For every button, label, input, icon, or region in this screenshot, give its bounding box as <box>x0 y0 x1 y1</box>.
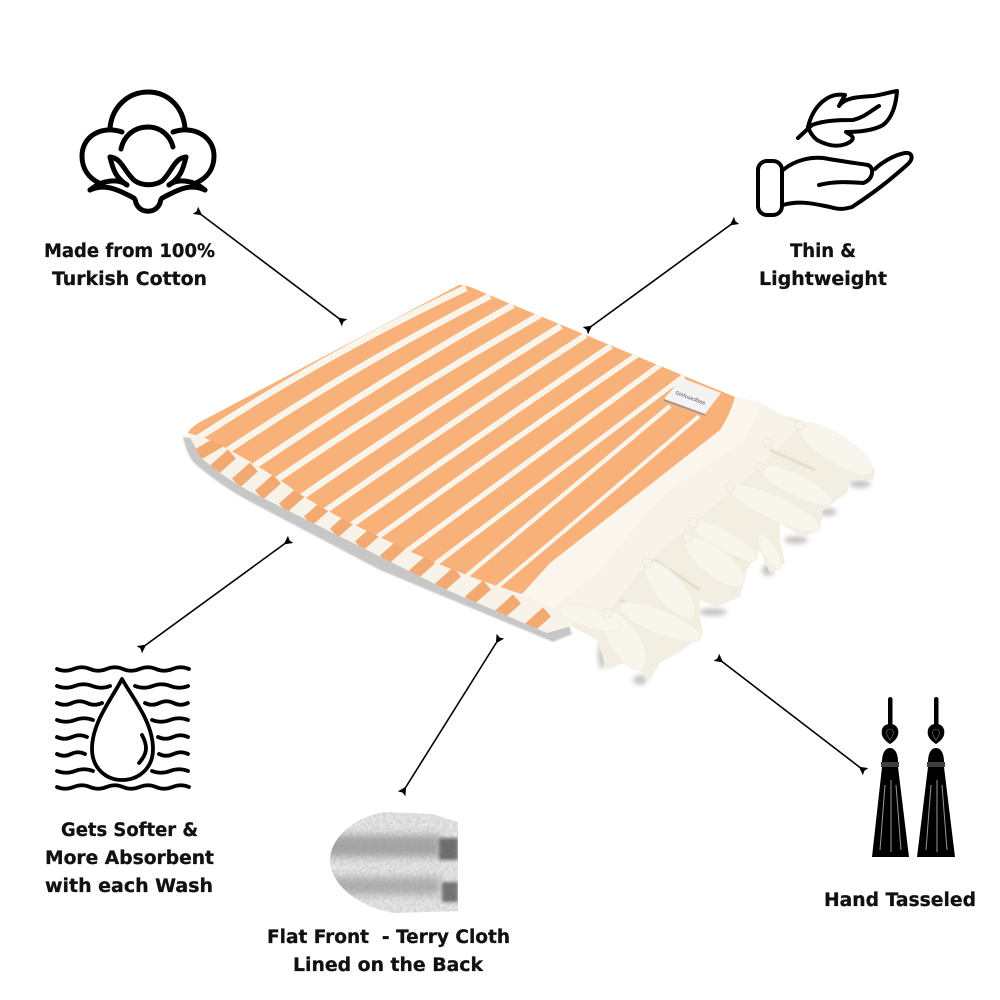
top face orange <box>188 285 735 594</box>
arrow: tassels to towel <box>720 660 862 769</box>
icon: cotton boll <box>82 92 214 211</box>
arrow: lightweight to towel <box>589 223 733 328</box>
heading: hand tasseled: Hand Tasseled <box>824 890 976 911</box>
tassel shadows <box>598 480 871 685</box>
heading: thin and lightweight <box>759 241 887 290</box>
heading: flat front terry cloth: Flat Front - Terry Cloth <box>267 927 510 948</box>
white stripes <box>198 288 699 594</box>
brand label <box>664 378 721 416</box>
underside folded layer with stripes <box>188 433 568 633</box>
icon: water drop with waves <box>57 667 189 789</box>
arrow: absorbent to towel <box>143 542 287 647</box>
heading: made from cotton: Made from 100% <box>44 241 215 262</box>
heading: softer and absorbent: Gets Softer & <box>61 820 198 841</box>
heading: softer and absorbent: More Absorbent <box>45 848 214 869</box>
heading: flat front terry cloth: Lined on the Back <box>293 955 484 976</box>
heading: softer and absorbent: with each Wash <box>45 876 213 897</box>
towel shadow <box>183 437 572 642</box>
tassel left <box>872 697 909 857</box>
fabric swatch <box>330 812 458 913</box>
heading: flat front terry cloth <box>267 927 510 976</box>
fringe gaps shading <box>620 450 815 625</box>
icon: tassels <box>872 697 955 857</box>
icon: hand with feather <box>758 91 912 215</box>
heading: softer and absorbent <box>45 820 214 897</box>
fringe silhouette <box>552 400 875 680</box>
brand label: Oinfusedbee <box>674 390 706 407</box>
heading: thin and lightweight: Lightweight <box>759 269 887 290</box>
heading: made from cotton: Turkish Cotton <box>52 269 207 290</box>
tassel right <box>917 697 955 857</box>
tassels <box>556 414 880 677</box>
heading: made from cotton <box>44 241 215 290</box>
arrow: terry cloth to towel <box>404 640 498 790</box>
cream border <box>522 397 762 608</box>
heading: thin and lightweight: Thin & <box>790 241 856 262</box>
arrow: cotton to towel <box>199 213 341 320</box>
woven fringe base <box>522 397 800 628</box>
towel photo <box>183 285 880 685</box>
tassel knots <box>602 420 805 618</box>
